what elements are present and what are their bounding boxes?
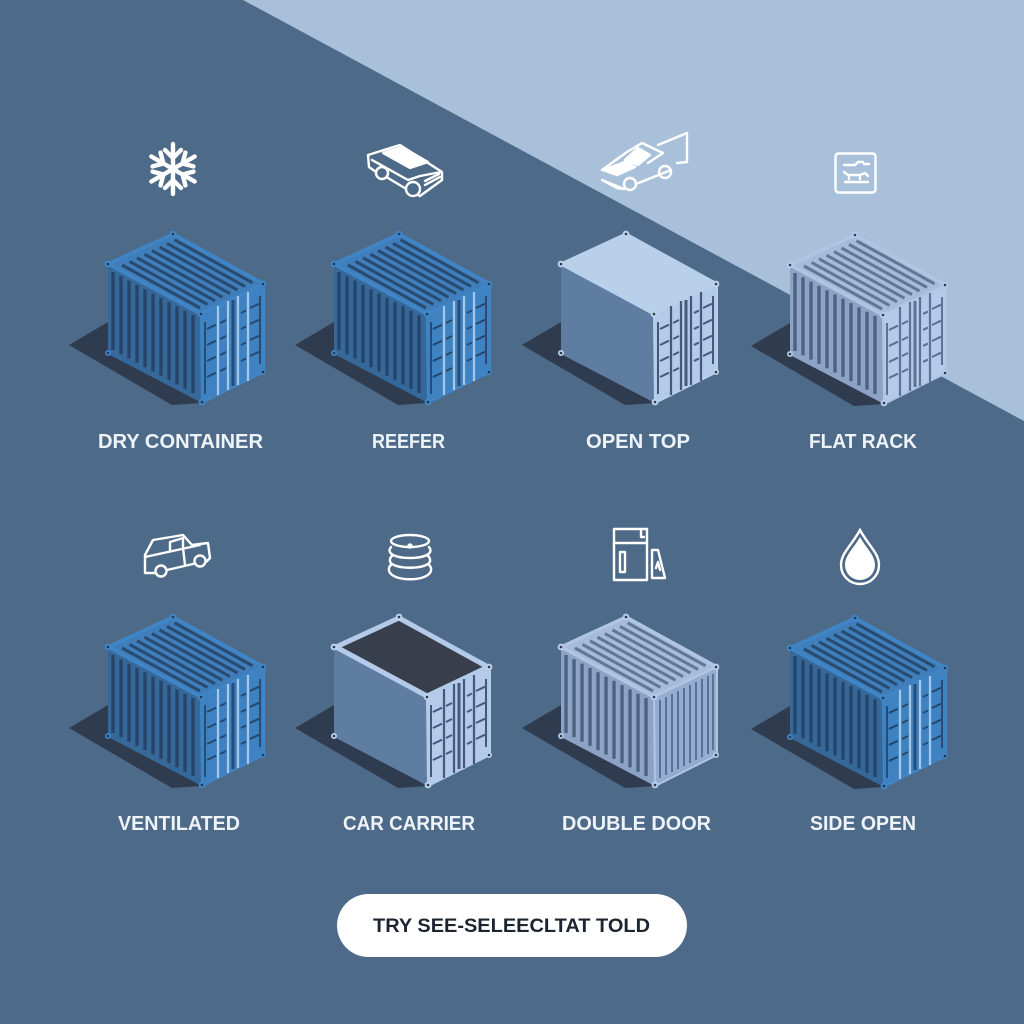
container: side open [751, 615, 948, 789]
label: side open: SIDE OPEN [810, 813, 916, 835]
container: open top [522, 231, 719, 405]
container: double door [522, 614, 719, 788]
label: double door: DOUBLE DOOR [562, 813, 712, 835]
button: TRY SEE-SELEECLTAT TOLD [373, 916, 650, 937]
diagonal light corner panel [243, 0, 1024, 421]
icon: snowflake [147, 144, 199, 194]
icon: fridge and fuel nozzle [614, 529, 665, 580]
label: reefer: REEFER [372, 431, 445, 453]
container: flat rack [751, 232, 948, 406]
icon: flat rack sign [836, 154, 876, 192]
label: ventilated: VENTILATED [118, 813, 240, 835]
button [337, 894, 687, 957]
container: ventilated [69, 614, 266, 788]
label: car carrier: CAR CARRIER [343, 813, 476, 835]
icon: vintage car [145, 535, 210, 576]
icon: car [368, 145, 442, 196]
container: dry container [69, 231, 266, 405]
icon: barrels [389, 535, 431, 579]
label: dry container: DRY CONTAINER [98, 431, 264, 453]
icon: water drop [841, 530, 879, 584]
label: flat rack: FLAT RACK [809, 431, 918, 453]
label: open top: OPEN TOP [586, 431, 690, 453]
container: reefer [295, 231, 492, 405]
container: car carrier [295, 614, 492, 788]
icon: pickup truck [602, 133, 687, 190]
